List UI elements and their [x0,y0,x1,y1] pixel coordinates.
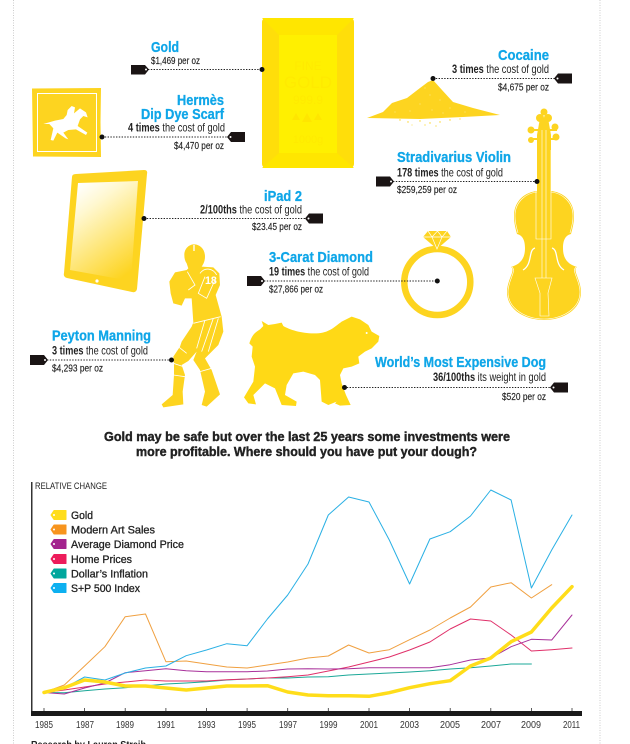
callout: most expensive dog: 36/100ths its weight in gold [433,370,546,384]
callout: Peyton Manning: $4,293 per oz [52,362,103,374]
callout: most expensive dog [342,354,568,403]
legend: S+P 500 Index [71,583,140,595]
year labels: 2003 [400,720,419,731]
callout: most expensive dog: World’s Most Expensive Dog [375,354,546,371]
callout: iPad 2: 2/100ths the cost of gold [200,202,302,216]
line chart: relative change 1985-2011 [31,481,582,731]
callout: Cocaine: 3 times the cost of gold [452,62,549,76]
callout: Hermes scarf [100,92,245,152]
line: dollar's inflation [44,664,531,693]
callout: 3-carat diamond: $27,866 per oz [269,284,323,296]
legend: Average Diamond Price [71,539,184,551]
callout: Stradivarius violin: 178 times the cost of gold [397,166,503,180]
year labels: 1991 [157,720,175,731]
year labels: 2007 [481,720,501,731]
callout: Hermes scarf: Hermès [177,92,224,109]
callout: Peyton Manning [30,328,174,374]
chart heading: more profitable. Where should you have put your dough? [136,445,477,459]
callout: Hermes scarf: $4,470 per oz [174,140,224,152]
icon: cocaine pile [367,80,500,127]
year labels: 1985 [35,720,53,731]
year labels: 2005 [440,720,460,731]
icon: gold bar [262,18,354,168]
year labels: 2011 [563,720,580,731]
icon: dog [244,317,379,406]
callout: Cocaine: Cocaine [498,47,549,64]
icon: Hermes scarf with horse [32,88,101,157]
line: modern art sales [44,583,552,692]
year labels: 1987 [76,720,94,731]
icon: gold bar: 1000g [293,134,323,146]
line: S+P 500 index [44,490,572,692]
legend: Dollar’s Inflation [71,568,148,580]
icon: football player: 18 [205,275,217,287]
year labels: 2009 [521,720,541,731]
icon: football player [162,244,223,407]
year labels: 1997 [279,720,297,731]
icon: violin [507,108,581,320]
callout: Stradivarius violin [376,149,540,196]
icon: gold bar: FINE [294,59,322,73]
callout: Hermes scarf: 4 times the cost of gold [128,120,225,134]
legend: Gold [71,510,93,522]
callout: most expensive dog: $520 per oz [502,391,546,403]
line: home prices [44,619,572,692]
year labels: 2001 [360,720,378,731]
legend: Home Prices [71,554,132,566]
callout: Hermes scarf: Dip Dye Scarf [141,106,225,123]
legend [51,510,184,595]
icon: gold bar: 999.9 [293,93,323,107]
callout: Cocaine: $4,675 per oz [498,82,549,94]
year labels: 1999 [320,720,338,731]
callout: Gold: Gold [151,39,179,56]
line: gold [44,587,572,696]
year labels: 1993 [198,720,216,731]
callout: Cocaine [430,47,572,94]
icon: gold bar: GOLD [284,73,332,92]
callout: iPad 2: iPad 2 [264,188,302,205]
callout: Gold [131,39,264,74]
callout: Stradivarius violin: $259,259 per oz [397,184,457,196]
line: average diamond price [44,615,572,694]
callout: Gold: $1,469 per oz [151,55,200,67]
callout: iPad 2: $23.45 per oz [252,221,302,233]
chart heading [104,430,510,459]
callout: Stradivarius violin: Stradivarius Violin [397,149,511,166]
callout: 3-carat diamond [247,249,440,296]
axis label: RELATIVE CHANGE [35,481,107,492]
callout: iPad 2 [142,188,323,233]
callout: 3-carat diamond: 3-Carat Diamond [269,249,373,266]
callout: Peyton Manning: 3 times the cost of gold [52,344,148,358]
legend: Modern Art Sales [71,524,155,536]
year labels: 1989 [116,720,134,731]
icon: diamond ring [404,231,470,315]
year labels [35,720,580,731]
callout: 3-carat diamond: 19 times the cost of gold [269,264,369,278]
icon: iPad [64,170,147,292]
year labels: 1995 [238,720,256,731]
callout: Peyton Manning: Peyton Manning [52,328,151,344]
axes [31,482,582,716]
chart heading: Gold may be safe but over the last 25 years some investments were [104,430,510,444]
